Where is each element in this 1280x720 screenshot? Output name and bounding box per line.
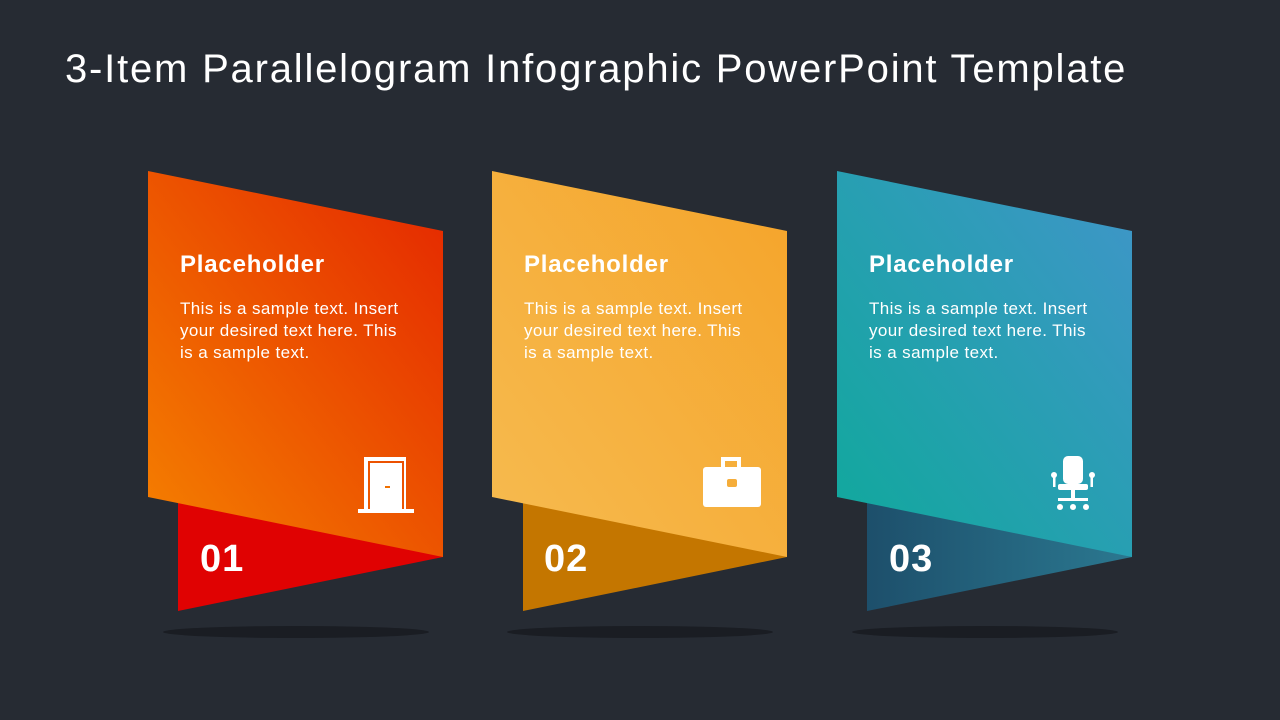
icon: door: [358, 457, 414, 513]
title: 3-Item Parallelogram Infographic PowerPoint Template: [65, 47, 1127, 91]
card 1: is a sample text.: [180, 343, 310, 362]
card 3: [837, 171, 1132, 638]
card 2: This is a sample text. Insert: [524, 299, 743, 318]
card 2: Placeholder: [524, 251, 669, 278]
card 3: your desired text here. This: [869, 321, 1086, 340]
card 2: 02: [544, 538, 588, 580]
card 2: your desired text here. This: [524, 321, 741, 340]
card 1: Placeholder: [180, 251, 325, 278]
card 2: [492, 171, 787, 638]
icon: office chair: [1051, 456, 1095, 510]
card 2: is a sample text.: [524, 343, 654, 362]
card 3: is a sample text.: [869, 343, 999, 362]
card 3: This is a sample text. Insert: [869, 299, 1088, 318]
card 1: This is a sample text. Insert: [180, 299, 399, 318]
card 3: Placeholder: [869, 251, 1014, 278]
icon: briefcase: [703, 457, 761, 507]
card 1: your desired text here. This: [180, 321, 397, 340]
card 3: 03: [889, 538, 933, 580]
card 1: 01: [200, 538, 244, 580]
card 1: [148, 171, 443, 638]
